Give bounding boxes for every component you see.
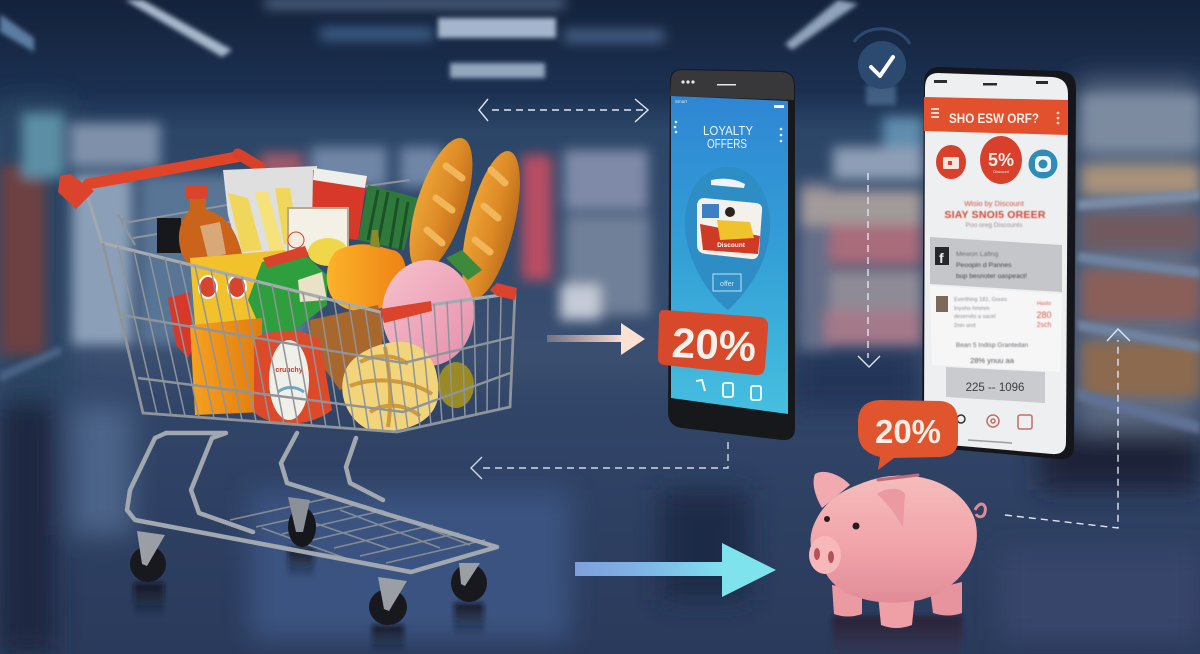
arrow: dashed return from phone to cart <box>471 442 728 479</box>
offer circles <box>936 136 1058 184</box>
snout <box>809 536 841 574</box>
price field <box>946 367 1045 403</box>
promo text <box>944 199 1046 229</box>
gray message card <box>930 237 1062 292</box>
gray message card: Mewon Lafing <box>956 251 999 258</box>
white item card: deservits a sacel <box>954 314 996 320</box>
legs <box>832 585 862 616</box>
badge: 20% on loyalty phone <box>658 310 768 375</box>
back wheel <box>288 497 316 547</box>
orange pack <box>190 318 262 415</box>
status bar <box>934 80 1048 86</box>
lower cart frame and wheels <box>127 433 497 625</box>
white item card: 28% ynuu aa <box>970 356 1015 365</box>
pastries <box>342 342 438 431</box>
green vegetables <box>358 185 418 250</box>
arrow: dashed from piggy bank up to shelf <box>1005 329 1130 528</box>
snack bag <box>223 166 318 258</box>
eyes <box>824 516 860 530</box>
speech bubble: 20%: 20% <box>875 413 941 450</box>
bottle <box>179 198 243 268</box>
lemon <box>308 238 348 266</box>
groceries: crunchy <box>275 367 303 374</box>
gray message card: f <box>939 250 944 266</box>
bread loaf <box>310 305 384 390</box>
price field: 225 -- 1096 <box>966 382 1024 394</box>
olive fruit <box>438 362 474 408</box>
basket rear wires <box>118 180 410 245</box>
white label card <box>288 208 348 253</box>
heading: loyalty offers <box>703 123 753 151</box>
promo text: SIAY SNOI5 OREER <box>944 209 1046 221</box>
basket front wires <box>103 243 515 432</box>
bottom icons <box>957 415 1032 443</box>
gray message card: bup besnoter oaspeact! <box>956 273 1027 280</box>
groceries <box>157 131 532 431</box>
tail <box>975 504 985 517</box>
white item card: Everthing 181, Gours <box>954 297 1007 303</box>
gray message card: Peoopin d Pannes <box>956 262 1012 269</box>
offer button <box>713 274 741 291</box>
white item card: Inyoho hmmm <box>954 306 990 312</box>
heading: loyalty offers: OFFERS <box>707 136 747 151</box>
arrow: peach flow to phone <box>547 323 645 355</box>
white item card <box>930 286 1062 372</box>
body <box>811 475 977 603</box>
icon: piggy bank <box>809 472 985 628</box>
phone top bar details: Smart <box>675 99 688 104</box>
badge: 20% on loyalty phone: 20% <box>671 319 757 370</box>
phone: loyalty offers <box>668 69 795 440</box>
yellow pepper <box>327 244 406 311</box>
arrow: blue flow to piggy bank <box>575 543 776 597</box>
speech bubble: 20% <box>858 400 958 470</box>
phone top bar details <box>675 80 784 108</box>
heading: loyalty offers: LOYALTY <box>703 123 753 138</box>
handle <box>58 154 260 243</box>
promo text: Poo oreg Discounts <box>966 222 1023 229</box>
arrow: dashed down between phones <box>858 173 880 367</box>
pink ham <box>382 260 474 366</box>
basket red corner guards <box>380 283 517 323</box>
red pack <box>312 170 367 240</box>
shopping cart with groceries <box>58 131 532 625</box>
offer button: offer <box>720 281 735 288</box>
black item <box>157 218 181 253</box>
bottom nav icons <box>696 380 761 400</box>
offer card: Discount <box>717 242 746 249</box>
map pin offer bubble <box>685 167 770 310</box>
promo text: Wisio by Discount <box>964 199 1025 208</box>
white item card: 280 <box>1036 310 1052 320</box>
offer circles: Discount <box>993 169 1010 174</box>
white item card: 2sch <box>1037 322 1051 329</box>
arrow: dashed double arrow top <box>479 99 648 122</box>
white item card: Hasto <box>1037 301 1051 307</box>
white item card: Bean 5 Indisp Grantedan <box>956 342 1029 349</box>
menu dots <box>674 121 782 142</box>
baguettes <box>397 131 485 279</box>
red jar with label <box>254 331 332 424</box>
red carton <box>168 292 192 358</box>
orange header <box>924 97 1068 135</box>
ears <box>814 472 850 508</box>
icon: verified check badge <box>854 29 910 105</box>
green jar <box>248 252 327 332</box>
white item card: 2nin and <box>954 323 975 329</box>
offer circles: 5% <box>988 150 1014 170</box>
orange header: SHO ESW ORF? <box>949 111 1039 126</box>
yellow box <box>190 250 290 325</box>
phone: shop offers <box>922 67 1076 459</box>
offer card <box>697 198 762 259</box>
coin slot <box>878 475 918 480</box>
